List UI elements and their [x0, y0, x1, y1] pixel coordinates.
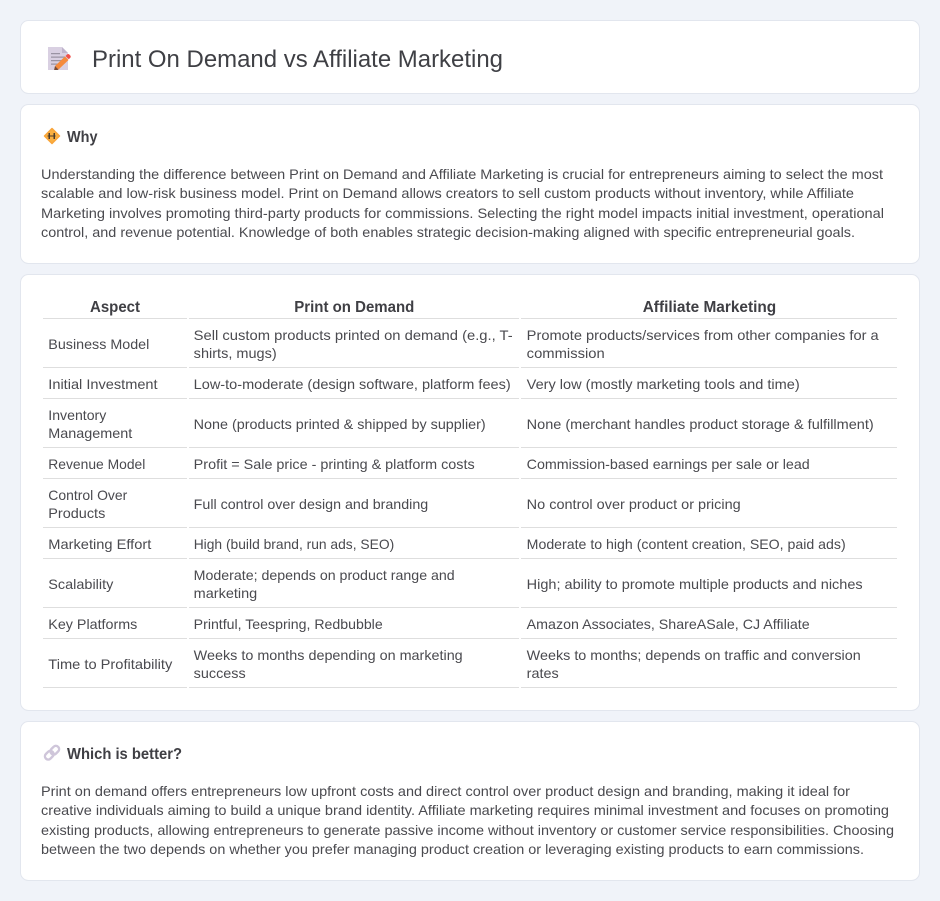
row: inventory management: [43, 407, 897, 448]
icon: chain link: [44, 745, 60, 761]
row: control over products: Full control over design and branding: [194, 496, 428, 512]
text block: why paragraph: Marketing involves promoting third-party products for commissions. Selecting the right model impacts initial investment, operational: [41, 205, 884, 221]
row: initial investment: Low-to-moderate (design software, platform fees): [194, 376, 511, 392]
row: control over products: Products: [48, 505, 105, 521]
text block: which is better paragraph: creative individuals aiming to build a unique brand identity. Affiliate marketing requires minimal investment and focuses on promoting: [41, 802, 889, 818]
row: initial investment: Very low (mostly marketing tools and time): [527, 376, 800, 392]
row: initial investment: [43, 376, 897, 399]
row: revenue model: Profit = Sale price - printing & platform costs: [194, 456, 475, 472]
text block: why paragraph: [41, 166, 884, 240]
row: revenue model: Commission-based earnings per sale or lead: [527, 456, 810, 472]
panel: comparison table: [20, 274, 920, 710]
row: time to profitability: success: [194, 665, 246, 681]
row: inventory management: Management: [48, 425, 132, 441]
row: time to profitability: [43, 647, 897, 688]
row: inventory management: None (products printed & shipped by supplier): [194, 416, 486, 432]
table header row: Print on Demand: [294, 299, 414, 316]
heading: which is better: Which is better?: [67, 746, 182, 763]
panel: title header: [20, 20, 920, 94]
row: scalability: Moderate; depends on product range and: [194, 567, 455, 583]
row: control over products: [43, 487, 897, 528]
row: control over products: No control over product or pricing: [527, 496, 741, 512]
row: key platforms: [43, 616, 897, 639]
text block: why paragraph: Understanding the difference between Print on Demand and Affiliate Marketing is crucial for entrepreneurs aiming to select the most: [41, 166, 883, 182]
icon: document with pencil: [48, 47, 71, 70]
row: key platforms: Printful, Teespring, Redbubble: [194, 616, 383, 632]
row: business model: Business Model: [48, 336, 149, 352]
text block: which is better paragraph: between the two depends on whether you prefer managing product creation or leveraging existing products to earn commissions.: [41, 841, 864, 857]
row: marketing effort: High (build brand, run ads, SEO): [194, 536, 394, 552]
row: business model: commission: [527, 345, 605, 361]
row: revenue model: Revenue Model: [48, 456, 145, 472]
text block: which is better paragraph: [41, 783, 894, 857]
text block: which is better paragraph: Print on demand offers entrepreneurs low upfront costs and direct control over product design and branding, making it ideal for: [41, 783, 850, 799]
row: scalability: Scalability: [48, 576, 113, 592]
row: time to profitability: Weeks to months depending on marketing: [194, 647, 463, 663]
row: time to profitability: Time to Profitability: [48, 656, 172, 672]
row: business model: [43, 327, 897, 368]
row: scalability: marketing: [194, 585, 257, 601]
row: initial investment: Initial Investment: [48, 376, 158, 392]
row: time to profitability: Weeks to months; depends on traffic and conversion: [527, 647, 861, 663]
table header row: Aspect: [90, 299, 141, 316]
heading: why: Why: [67, 129, 98, 146]
row: inventory management: Inventory: [48, 407, 106, 423]
text block: why paragraph: control, and revenue potential. Knowledge of both enables strategic decision-making aligned with specific entrepreneurial goals.: [41, 224, 855, 240]
panel: why: [20, 104, 920, 264]
row: marketing effort: Moderate to high (content creation, SEO, paid ads): [527, 536, 846, 552]
row: revenue model: [43, 456, 897, 479]
row: scalability: High; ability to promote multiple products and niches: [527, 576, 863, 592]
row: business model: shirts, mugs): [194, 345, 277, 361]
row: scalability: [43, 567, 897, 608]
row: business model: Promote products/services from other companies for a: [527, 327, 879, 343]
table header row: [43, 299, 897, 319]
text block: which is better paragraph: existing products, allowing entrepreneurs to generate passive income without inventory or customer service responsibilities. Choosing: [41, 822, 894, 838]
row: time to profitability: rates: [527, 665, 559, 681]
row: marketing effort: Marketing Effort: [48, 536, 151, 552]
icon: warning diamond: [44, 128, 60, 144]
row: key platforms: Amazon Associates, ShareASale, CJ Affiliate: [527, 616, 810, 632]
row: business model: Sell custom products printed on demand (e.g., T-: [194, 327, 513, 343]
row: control over products: Control Over: [48, 487, 128, 503]
table header row: Affiliate Marketing: [643, 299, 776, 316]
row: key platforms: Key Platforms: [48, 616, 137, 632]
title: Print On Demand vs Affiliate Marketing: [92, 46, 503, 73]
panel: which is better: [20, 722, 920, 880]
row: inventory management: None (merchant handles product storage & fulfillment): [527, 416, 874, 432]
text block: why paragraph: scalable and low-risk business model. Print on Demand allows creators to sell custom products without inventory, while Affiliate: [41, 185, 854, 201]
row: marketing effort: [43, 536, 897, 559]
